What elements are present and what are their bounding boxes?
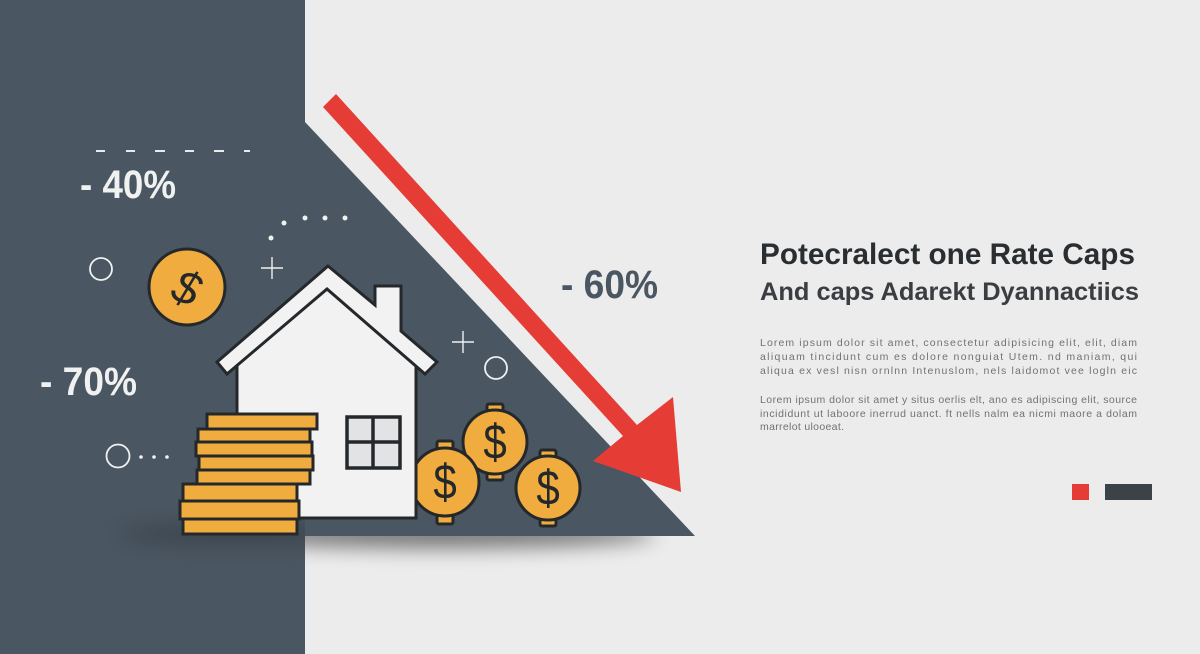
body paragraph 1: aliquam tincidunt cum es dolore nonguiat Utem. nd maniam, qui	[760, 351, 1137, 363]
ground shadow	[120, 520, 655, 548]
label: -60%: - 60%	[561, 263, 658, 307]
icon: coin left: $	[433, 454, 457, 509]
body paragraph 2	[760, 394, 1137, 433]
label: -40%: - 40%	[80, 163, 176, 207]
icon: tilted dollar coin: $	[165, 258, 209, 317]
body paragraph 2: Lorem ipsum dolor sit amet y situs oerlis elt, ano es adipiscing elit, source	[760, 394, 1137, 406]
icon: coin behind middle	[463, 404, 527, 480]
icon: coin right: $	[536, 460, 560, 515]
body paragraph 1	[760, 337, 1137, 377]
icon: coin left	[411, 441, 479, 524]
legend: red square	[1072, 484, 1089, 500]
decorative dashes	[96, 150, 250, 152]
dark triangle	[305, 122, 695, 536]
body paragraph 2: marrelot ulooeat.	[760, 421, 844, 433]
icon: tilted dollar coin	[149, 249, 225, 325]
label: -70%: - 70%	[40, 360, 137, 404]
title	[760, 238, 1139, 306]
icon: coin stack	[180, 414, 317, 534]
red down arrow	[323, 94, 681, 492]
body paragraph 1: aliqua ex vesl nisn ornlnn Intenuslom, nels laidomot vee logln eic	[760, 365, 1137, 377]
title: And caps Adarekt Dyannactiics	[760, 278, 1139, 306]
dark left panel	[0, 0, 305, 654]
title: Potecralect one Rate Caps	[760, 238, 1135, 271]
body paragraph 2: incididunt ut laboore inerrud uanct. ft nells nalm ea nicmi maore a dolam	[760, 408, 1137, 420]
icon: house	[217, 266, 437, 518]
icon: coin behind middle: $	[483, 414, 507, 469]
body paragraph 1: Lorem ipsum dolor sit amet, consectetur adipisicing elit, elit, diam	[760, 337, 1137, 349]
window	[347, 417, 400, 468]
legend: dark bar	[1105, 484, 1152, 500]
icon: coin right	[516, 450, 580, 526]
decorative dots and circles	[90, 216, 507, 468]
